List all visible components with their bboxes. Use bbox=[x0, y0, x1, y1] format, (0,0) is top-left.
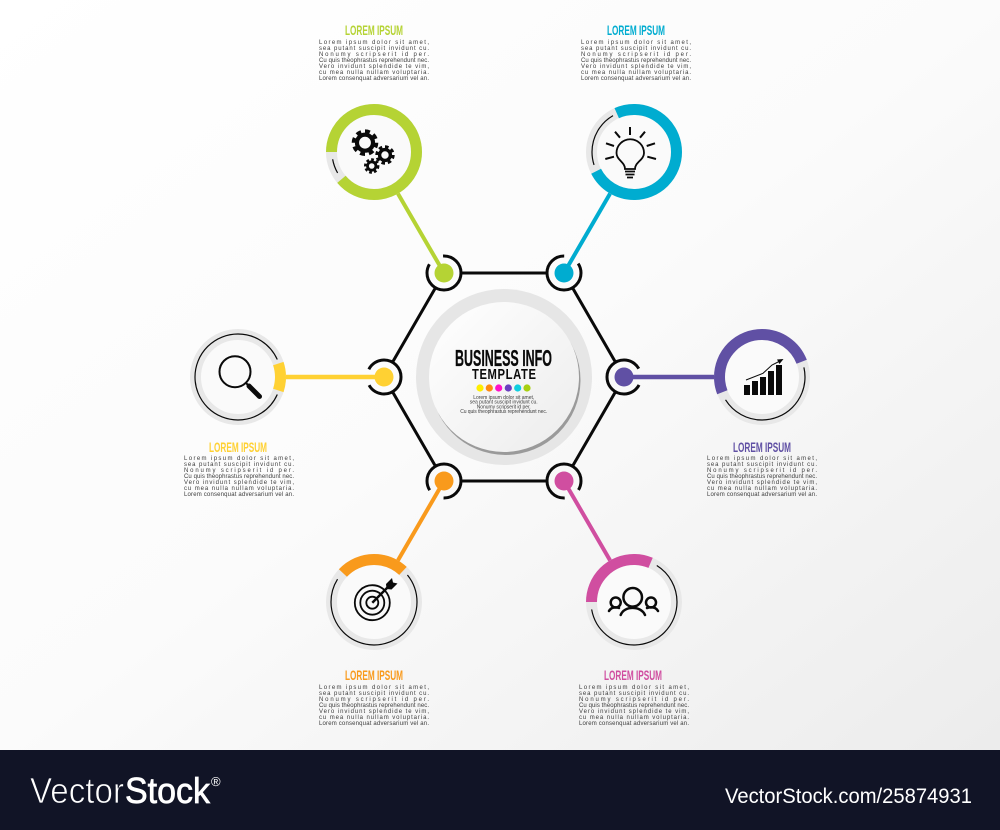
heading blue: LOREM IPSUM bbox=[607, 22, 665, 38]
text block purple: cu mea nulla nullam voluptaria. bbox=[707, 486, 817, 492]
central title: BUSINESS INFO bbox=[455, 345, 552, 371]
ring orange bbox=[326, 554, 422, 650]
text block purple: Nonumy scripserit id per. bbox=[707, 468, 817, 474]
text block yellow: Vero invidunt splendide te vim, bbox=[184, 480, 294, 486]
panel: gears (green) bbox=[319, 22, 461, 290]
text block yellow: Cu quis theophrastus reprehendunt nec. bbox=[184, 474, 294, 480]
heading orange: LOREM IPSUM bbox=[345, 667, 403, 683]
text block blue: Vero invidunt splendide te vim, bbox=[581, 64, 691, 70]
text block pink bbox=[579, 685, 689, 727]
text block orange bbox=[319, 685, 429, 727]
central text block: Cu quis theophrastus reprehendunt nec. bbox=[460, 409, 547, 415]
hexagon frame bbox=[392, 273, 616, 481]
heading pink: LOREM IPSUM bbox=[604, 667, 662, 683]
text block orange: Cu quis theophrastus reprehendunt nec. bbox=[319, 703, 429, 709]
connector pink bbox=[564, 481, 611, 562]
text block green bbox=[319, 40, 429, 82]
connector yellow bbox=[284, 375, 384, 379]
text block orange: Lorem consenquat adversarium vel an. bbox=[319, 721, 429, 727]
central circle bbox=[416, 289, 592, 465]
text block blue: Cu quis theophrastus reprehendunt nec. bbox=[581, 58, 691, 64]
text block yellow: sea putant suscipit invidunt cu. bbox=[184, 462, 294, 468]
registered mark: ® bbox=[211, 774, 221, 789]
node blue bbox=[547, 256, 581, 290]
text block yellow: Nonumy scripserit id per. bbox=[184, 468, 294, 474]
central text block: Nonumy scripserit id per. bbox=[477, 404, 531, 410]
text block blue bbox=[581, 40, 691, 82]
text block green: Nonumy scripserit id per. bbox=[319, 52, 429, 58]
text block blue: Lorem ipsum dolor sit amet, bbox=[581, 40, 691, 46]
connector green bbox=[397, 192, 444, 273]
text block pink: Nonumy scripserit id per. bbox=[579, 697, 689, 703]
text block orange: Nonumy scripserit id per. bbox=[319, 697, 429, 703]
text block purple: Lorem consenquat adversarium vel an. bbox=[707, 492, 817, 498]
text block yellow: Lorem ipsum dolor sit amet, bbox=[184, 456, 294, 462]
panel: target (orange) bbox=[319, 464, 461, 727]
text block pink: Lorem consenquat adversarium vel an. bbox=[579, 721, 689, 727]
text block purple: sea putant suscipit invidunt cu. bbox=[707, 462, 817, 468]
text block purple: Cu quis theophrastus reprehendunt nec. bbox=[707, 474, 817, 480]
node yellow bbox=[367, 360, 401, 394]
colour dots bbox=[476, 384, 531, 392]
icon: magnifier bbox=[220, 356, 260, 396]
panel: search (yellow) bbox=[184, 329, 401, 498]
footer logo bbox=[30, 770, 211, 811]
heading yellow: LOREM IPSUM bbox=[209, 439, 267, 455]
ring pink bbox=[586, 554, 682, 650]
footer logo: Vector bbox=[30, 770, 124, 811]
text block purple: Vero invidunt splendide te vim, bbox=[707, 480, 817, 486]
icon: target bbox=[355, 578, 398, 620]
connector purple bbox=[624, 375, 718, 379]
text block pink: Cu quis theophrastus reprehendunt nec. bbox=[579, 703, 689, 709]
heading green: LOREM IPSUM bbox=[345, 22, 403, 38]
central subtitle: TEMPLATE bbox=[472, 365, 536, 382]
panel: growth (purple) bbox=[607, 329, 817, 498]
node pink bbox=[547, 464, 581, 498]
node green bbox=[427, 256, 461, 290]
text block blue: Nonumy scripserit id per. bbox=[581, 52, 691, 58]
heading purple: LOREM IPSUM bbox=[733, 439, 791, 455]
text block purple: Lorem ipsum dolor sit amet, bbox=[707, 456, 817, 462]
text block green: sea putant suscipit invidunt cu. bbox=[319, 46, 429, 52]
text block pink: sea putant suscipit invidunt cu. bbox=[579, 691, 689, 697]
text block pink: cu mea nulla nullam voluptaria. bbox=[579, 715, 689, 721]
connector blue bbox=[564, 192, 611, 273]
text block orange: Lorem ipsum dolor sit amet, bbox=[319, 685, 429, 691]
text block orange: sea putant suscipit invidunt cu. bbox=[319, 691, 429, 697]
ring yellow bbox=[190, 329, 286, 425]
connector orange bbox=[397, 481, 444, 562]
footer logo: Stock bbox=[125, 770, 211, 811]
text block blue: cu mea nulla nullam voluptaria. bbox=[581, 70, 691, 76]
icon: bar chart bbox=[744, 359, 784, 395]
text block orange: cu mea nulla nullam voluptaria. bbox=[319, 715, 429, 721]
central text block bbox=[460, 395, 547, 415]
text block green: Vero invidunt splendide te vim, bbox=[319, 64, 429, 70]
node orange bbox=[427, 464, 461, 498]
text block yellow: Lorem consenquat adversarium vel an. bbox=[184, 492, 294, 498]
text block yellow bbox=[184, 456, 294, 498]
text block blue: Lorem consenquat adversarium vel an. bbox=[581, 76, 691, 82]
icon: people bbox=[609, 588, 658, 615]
node purple bbox=[607, 360, 641, 394]
text block green: Cu quis theophrastus reprehendunt nec. bbox=[319, 58, 429, 64]
text block purple bbox=[707, 456, 817, 498]
ring blue bbox=[586, 104, 682, 200]
text block pink: Vero invidunt splendide te vim, bbox=[579, 709, 689, 715]
icon: gears bbox=[354, 131, 393, 172]
footer band bbox=[0, 750, 1000, 830]
text block green: Lorem consenquat adversarium vel an. bbox=[319, 76, 429, 82]
central text block: sea putant suscipit invidunt cu. bbox=[470, 400, 538, 406]
central text block: Lorem ipsum dolor sit amet, bbox=[473, 395, 534, 401]
panel: idea (blue) bbox=[547, 22, 691, 290]
text block green: cu mea nulla nullam voluptaria. bbox=[319, 70, 429, 76]
ring green bbox=[326, 104, 422, 200]
text block pink: Lorem ipsum dolor sit amet, bbox=[579, 685, 689, 691]
text block green: Lorem ipsum dolor sit amet, bbox=[319, 40, 429, 46]
footer id: VectorStock.com/25874931 bbox=[725, 785, 972, 808]
text block yellow: cu mea nulla nullam voluptaria. bbox=[184, 486, 294, 492]
text block blue: sea putant suscipit invidunt cu. bbox=[581, 46, 691, 52]
icon: light bulb bbox=[605, 127, 656, 178]
ring purple bbox=[714, 329, 810, 425]
text block orange: Vero invidunt splendide te vim, bbox=[319, 709, 429, 715]
panel: team (pink) bbox=[547, 464, 689, 727]
